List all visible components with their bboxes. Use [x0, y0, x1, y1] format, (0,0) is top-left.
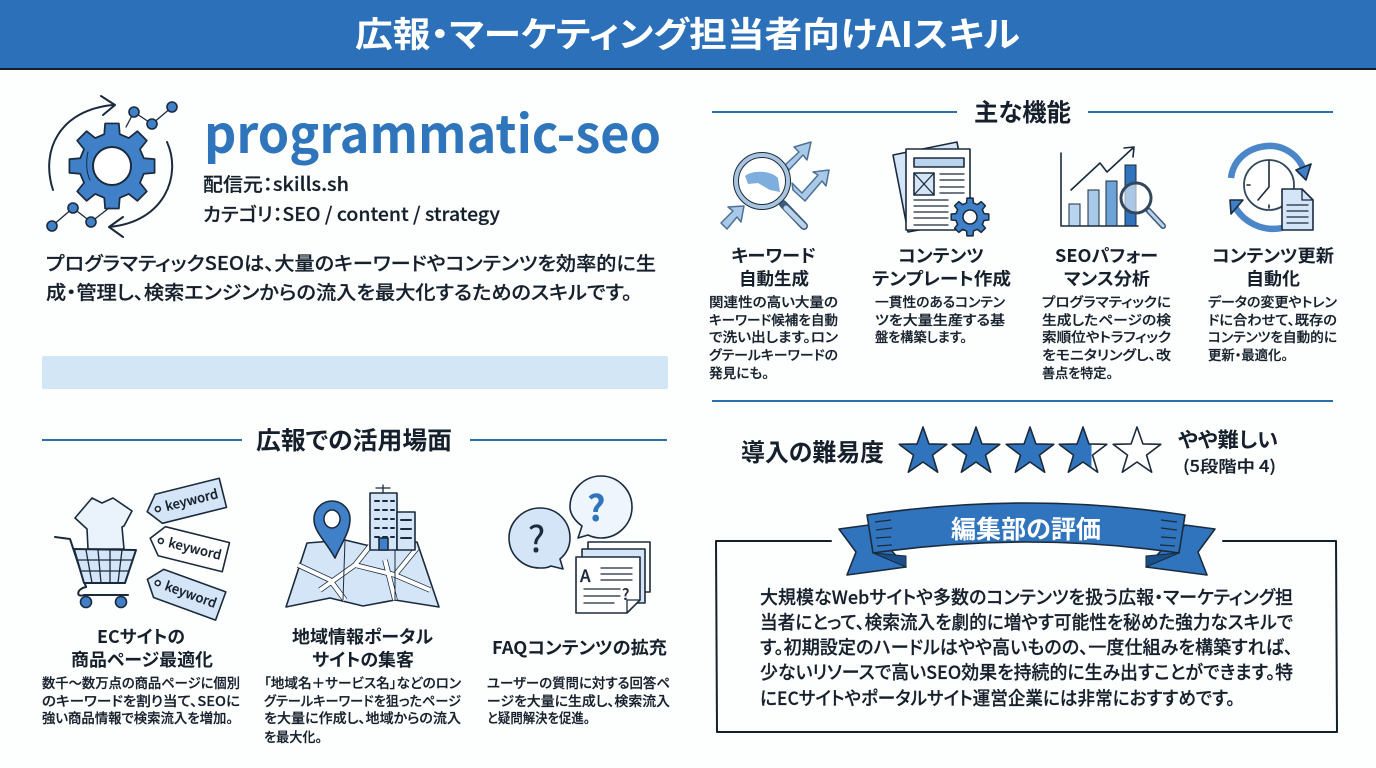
heading: PR use cases: 広報での活用場面	[256, 422, 452, 457]
feature: content templates: コンテンツ	[898, 242, 984, 268]
icon: shopping cart with keyword tags	[55, 478, 230, 620]
feature: content refresh automation: 更新・最適化。	[1208, 344, 1288, 364]
source and category	[203, 170, 501, 227]
icon: question bubbles and documents	[509, 476, 650, 613]
source and category: 配信元：skills.sh	[203, 170, 349, 197]
review text: にECサイトやポータルサイト運営企業には非常におすすめです。	[760, 684, 1235, 711]
feature: content refresh automation: コンテンツを自動的に	[1208, 326, 1337, 346]
feature: SEO performance analysis: 生成したページの検	[1042, 309, 1172, 329]
use case: EC site	[42, 478, 240, 727]
review text: 少ないリソースで高いSEO効果を持続的に生み出すことができます。特	[760, 658, 1293, 685]
icon: question bubbles and documents: ?	[587, 480, 606, 532]
header banner	[0, 0, 1376, 70]
difficulty rating: 導入の難易度	[741, 434, 884, 469]
use case: FAQ: ユーザーの質問に対する回答ペ	[487, 672, 670, 692]
use case: EC site: 強い商品情報で検索流入を増加。	[42, 707, 233, 727]
difficulty rating: (5段階中 4)	[1183, 453, 1276, 477]
use case: local portal: 「地域名＋サービス名」などのロン	[264, 672, 461, 692]
use case: local portal: 地域情報ポータル	[292, 623, 433, 649]
use case: EC site: 商品ページ最適化	[71, 646, 213, 672]
use case: EC site: 数千〜数万点の商品ページに個別	[42, 672, 240, 692]
light blue band	[42, 356, 668, 389]
feature: content templates	[872, 142, 1011, 346]
source and category: カテゴリ：SEO / content / strategy	[203, 200, 501, 227]
star rating: 4 of 5	[899, 427, 1161, 472]
feature: SEO performance analysis: 索順位やトラフィック	[1042, 326, 1171, 346]
difficulty rating: やや難しい	[1177, 423, 1278, 453]
icon: gear with cycle arrows and data nodes	[47, 96, 177, 237]
use case: FAQ: ージを大量に生成し、検索流入	[487, 690, 670, 710]
icon: question bubbles and documents: ?	[528, 511, 545, 563]
feature: content refresh automation	[1208, 146, 1337, 364]
feature: keyword generation: 関連性の高い大量の	[709, 291, 838, 311]
heading: main features: 主な機能	[974, 94, 1071, 129]
icon: map with pin and buildings	[286, 485, 439, 607]
summary text: プログラマティックSEOは、大量のキーワードやコンテンツを効率的に生	[46, 249, 656, 276]
use case: local portal	[264, 485, 461, 746]
icon: magnifier with arrows	[721, 142, 829, 229]
icon: question bubbles and documents: ?	[622, 584, 629, 605]
skill name: programmatic-seo	[204, 93, 661, 168]
use case: local portal: を最大化。	[264, 726, 322, 746]
feature: content templates: ツを大量生産する基	[875, 309, 1006, 329]
feature: content templates: 一貫性のあるコンテン	[875, 291, 1005, 311]
use case: local portal: サイトの集客	[312, 646, 414, 672]
feature: keyword generation: グテールキーワードの	[709, 344, 838, 364]
feature: keyword generation: 発見にも。	[709, 362, 769, 382]
feature: SEO performance analysis: 善点を特定。	[1042, 362, 1113, 382]
use case: local portal: グテールキーワードを狙ったページ	[264, 690, 461, 710]
feature: content templates: テンプレート作成	[872, 265, 1011, 291]
review text: す。初期設定のハードルはやや高いものの、一度仕組みを構築すれば、	[760, 633, 1293, 660]
icon: clock with cycle arrows and document	[1230, 146, 1313, 230]
review text	[760, 583, 1293, 711]
icon: shopping cart with keyword tags: keyword	[163, 483, 220, 515]
ribbon heading: 編集部の評価	[951, 510, 1101, 546]
difficulty rating	[741, 423, 1278, 477]
header banner: 広報・マーケティング担当者向けAIスキル	[355, 7, 1020, 58]
feature: content refresh automation: ドに合わせて、既存の	[1208, 309, 1337, 329]
feature: SEO performance analysis: をモニタリングし、改	[1042, 344, 1172, 364]
use case: FAQ	[487, 476, 670, 727]
icon: shopping cart with keyword tags: keyword	[163, 575, 220, 612]
use case: EC site: のキーワードを割り当て、SEOに	[42, 690, 240, 710]
icon: question bubbles and documents: A	[580, 562, 591, 587]
icon: bar chart with magnifier	[1061, 147, 1163, 226]
summary text: 成・管理し、検索エンジンからの流入を最大化するためのスキルです。	[46, 278, 632, 305]
feature: SEO performance analysis: マンス分析	[1064, 265, 1150, 291]
review text: 当者にとって、検索流入を劇的に増やす可能性を秘めた強力なスキルで	[760, 608, 1293, 635]
feature: SEO performance analysis: プログラマティックに	[1042, 291, 1171, 311]
use case: local portal: を大量に作成し、地域からの流入	[264, 707, 461, 727]
feature: keyword generation	[709, 142, 838, 382]
panel: editorial review	[716, 503, 1337, 732]
icon: shopping cart with keyword tags: keyword	[167, 532, 224, 564]
feature: keyword generation: キーワード	[731, 242, 816, 268]
feature: SEO performance analysis	[1042, 147, 1172, 382]
feature: content templates: 盤を構築します。	[875, 326, 967, 346]
use case: EC site: ECサイトの	[97, 623, 185, 649]
feature: content refresh automation: 自動化	[1246, 265, 1300, 291]
use case: FAQ: と疑問解決を促進。	[487, 707, 590, 727]
feature: content refresh automation: データの変更やトレン	[1208, 291, 1337, 311]
icon: document with gear	[893, 142, 989, 236]
feature: content refresh automation: コンテンツ更新	[1212, 242, 1334, 268]
feature: keyword generation: で洗い出します。ロン	[709, 326, 838, 346]
review text: 大規模なWebサイトや多数のコンテンツを扱う広報・マーケティング担	[760, 583, 1293, 610]
feature: SEO performance analysis: SEOパフォー	[1055, 242, 1158, 268]
feature: keyword generation: キーワード候補を自動	[709, 309, 838, 329]
summary text	[46, 249, 656, 305]
use case: FAQ: FAQコンテンツの拡充	[492, 634, 667, 660]
ribbon heading	[839, 503, 1215, 575]
feature: keyword generation: 自動生成	[739, 265, 809, 291]
